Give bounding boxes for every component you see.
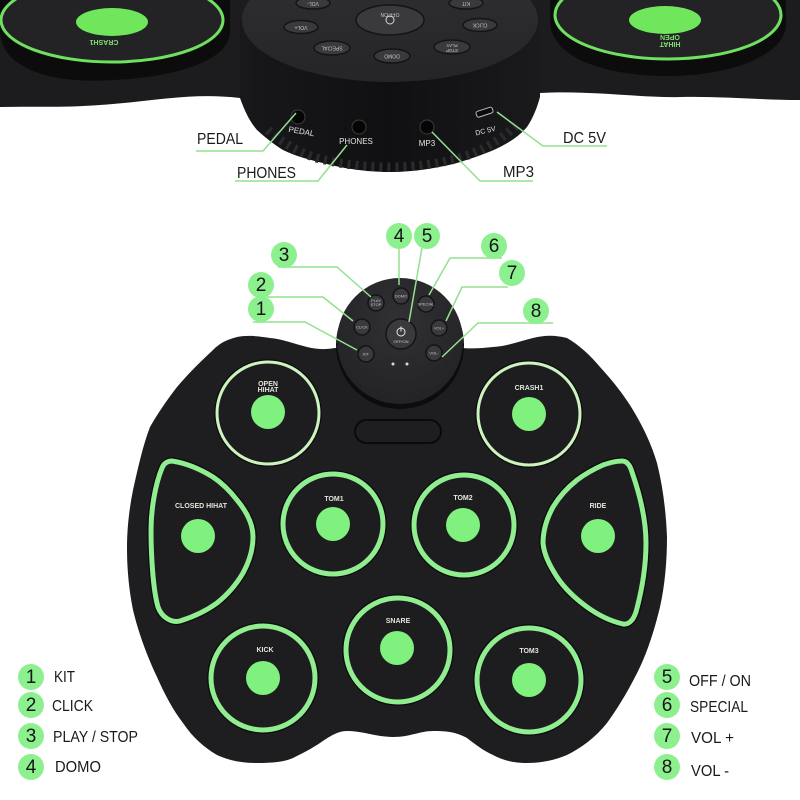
open hihat pad, upside-down: HIHAT [659, 40, 680, 47]
legend item 4 DOMO [18, 754, 101, 780]
top view: connector panel of drum kit [0, 0, 800, 182]
callout number 7: 7 [507, 263, 517, 284]
callout number 8: 8 [531, 301, 541, 322]
legend item 6 SPECIAL: SPECIAL [690, 699, 748, 716]
callout number 2: 2 [256, 275, 266, 296]
pad: RIDE: RIDE [590, 503, 607, 510]
pad: CLOSED HIHAT: CLOSED HIHAT [175, 503, 228, 510]
callout number 5: 5 [422, 226, 432, 247]
legend item 7 VOL +: VOL + [691, 730, 734, 747]
hub buttons, upside-down: VOL- [307, 0, 319, 6]
legend item 8 VOL -: VOL - [691, 763, 729, 780]
callout number 8 [523, 298, 549, 324]
legend item 5 OFF / ON: 5 [662, 667, 672, 688]
hub buttons, upside-down: SPECIAL [321, 44, 343, 50]
label: PEDAL: PEDAL [197, 131, 243, 148]
callout number 3 [271, 242, 297, 268]
control hub, top view: VOL- [429, 350, 439, 356]
callout number 1 [248, 296, 274, 322]
label: MP3: MP3 [503, 164, 534, 181]
pad: OPEN HIHAT: OPEN [258, 381, 278, 388]
label: DC 5V: DC 5V [563, 130, 606, 147]
legend item 3 PLAY / STOP: PLAY / STOP [53, 729, 138, 746]
hub buttons, upside-down: OFF/ON [380, 11, 399, 17]
callout number 1: 1 [256, 299, 266, 320]
pad: SNARE: SNARE [386, 618, 411, 625]
pad: TOM3 [477, 628, 581, 732]
connector callout lines [196, 112, 607, 181]
legend item 8 VOL -: 8 [662, 757, 672, 778]
pad: KICK [211, 626, 315, 730]
control hub, top view [336, 278, 464, 409]
legend item 5 OFF / ON [654, 664, 751, 690]
rubber mat strip [0, 0, 800, 107]
control hub, top view: DOMO [395, 294, 407, 298]
legend item 1 KIT: 1 [26, 667, 36, 688]
legend item 6 SPECIAL: 6 [662, 695, 672, 716]
control hub body with connectors [240, 0, 540, 172]
legend: right column [654, 664, 751, 780]
control hub, top view: SPECIAL [418, 302, 435, 306]
legend item 4 DOMO: DOMO [55, 759, 101, 776]
pad: TOM2 [414, 475, 514, 575]
pad: SNARE [346, 598, 450, 702]
control hub, top view: KIT [363, 352, 370, 356]
legend item 6 SPECIAL [654, 692, 748, 718]
jacks: PEDAL [288, 125, 316, 138]
callout number 5 [414, 223, 440, 249]
legend item 5 OFF / ON: OFF / ON [689, 673, 751, 690]
pad: CRASH1: CRASH1 [515, 385, 543, 392]
legend item 8 VOL - [654, 754, 729, 780]
control hub, top view: STOP [371, 302, 382, 307]
button callout lines [253, 248, 553, 357]
pad: OPEN HIHAT [217, 362, 319, 464]
legend item 1 KIT: KIT [54, 669, 75, 686]
hub buttons, upside-down: KIT [462, 0, 470, 6]
callout number 4 [386, 223, 412, 249]
pill recess [355, 420, 441, 443]
hub buttons, upside-down: CLICK [472, 22, 487, 28]
control hub, top view: CLICK [356, 324, 368, 330]
pad: RIDE [543, 461, 646, 624]
legend item 7 VOL + [654, 723, 734, 749]
jacks: MP3 [419, 139, 436, 148]
jacks: DC 5V [475, 126, 497, 137]
callout number 6: 6 [489, 236, 499, 257]
callout number 7 [499, 260, 525, 286]
control hub, top view: PLAY [371, 298, 381, 303]
label: PHONES: PHONES [237, 165, 296, 182]
pad: TOM3: TOM3 [519, 648, 539, 655]
open hihat pad, upside-down [550, 0, 786, 76]
legend item 4 DOMO: 4 [26, 757, 37, 778]
legend item 3 PLAY / STOP: 3 [26, 726, 36, 747]
pad: CLOSED HIHAT [151, 461, 253, 621]
main view: drum pad mat [127, 336, 667, 763]
pad: TOM1 [283, 474, 383, 574]
hub buttons, upside-down: PLAY [446, 43, 458, 48]
pad: TOM2: TOM2 [453, 495, 473, 502]
legend item 7 VOL +: 7 [662, 726, 672, 747]
crash pad, upside-down: CRASH1 [90, 38, 118, 45]
callout number 4: 4 [394, 226, 405, 247]
callout number 2 [248, 272, 274, 298]
pad: CRASH1 [478, 363, 580, 465]
crash pad, upside-down [0, 0, 230, 81]
legend item 1 KIT [18, 664, 75, 690]
pad: KICK: KICK [256, 647, 274, 654]
hub buttons, upside-down: VOL+ [294, 24, 307, 30]
hub buttons, upside-down [284, 0, 497, 63]
legend item 3 PLAY / STOP [18, 723, 138, 749]
legend item 2 CLICK: 2 [26, 695, 36, 716]
callout number 3: 3 [279, 245, 289, 266]
open hihat pad, upside-down: OPEN [660, 33, 680, 40]
hub buttons, upside-down: STOP [446, 48, 458, 53]
jacks: PHONES [339, 137, 373, 146]
pad: OPEN HIHAT: HIHAT [258, 387, 279, 394]
hub buttons, upside-down: DOMO [384, 52, 400, 58]
pad: TOM1: TOM1 [324, 496, 344, 503]
callout number 6 [481, 233, 507, 259]
legend: left column [18, 664, 138, 780]
control hub, top view: VOL+ [434, 326, 445, 330]
control hub, top view: OFF/ON [393, 339, 409, 344]
legend item 2 CLICK: CLICK [52, 698, 93, 715]
legend item 2 CLICK [18, 692, 93, 718]
jacks [288, 107, 497, 148]
